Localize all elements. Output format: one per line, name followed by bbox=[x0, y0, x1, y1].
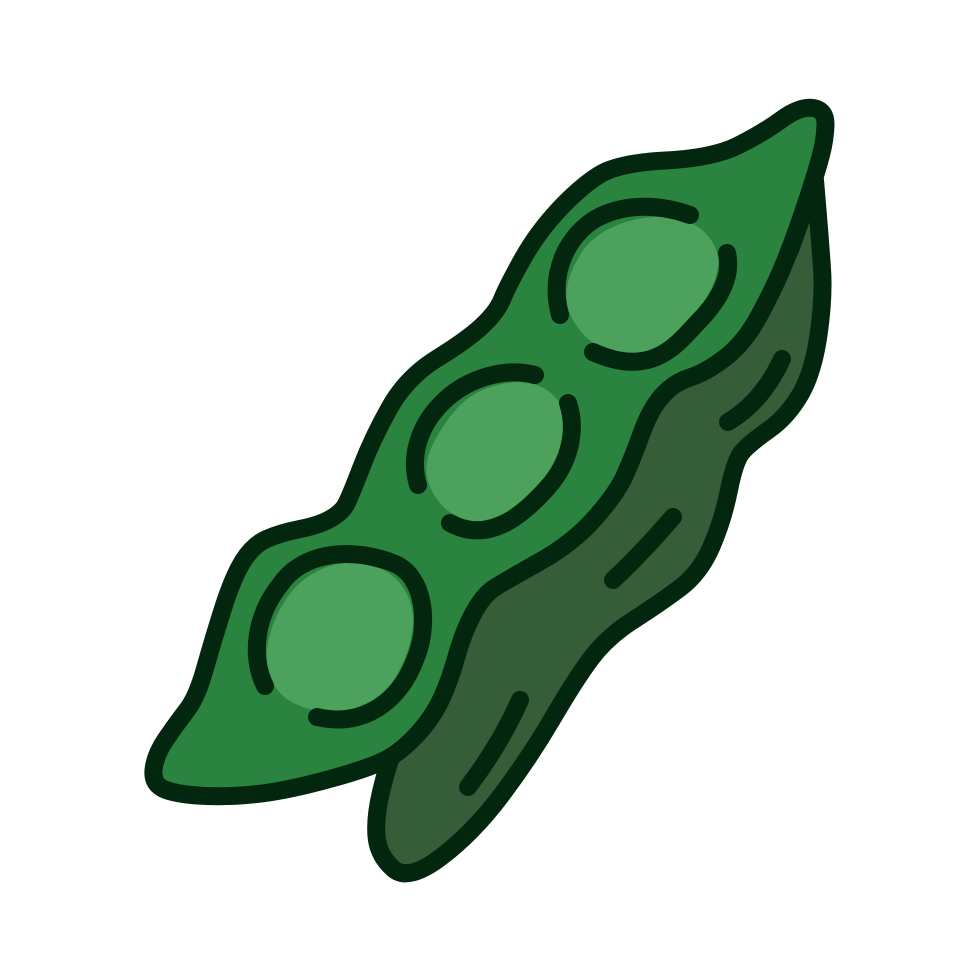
bean outlines bbox=[257, 207, 728, 719]
pod shell dashes bbox=[468, 359, 782, 787]
bean 2 bbox=[426, 382, 566, 521]
bean 3 bbox=[267, 563, 413, 712]
back pod shell bbox=[376, 180, 823, 873]
front pod bbox=[153, 108, 826, 796]
bean 1 bbox=[566, 217, 718, 355]
